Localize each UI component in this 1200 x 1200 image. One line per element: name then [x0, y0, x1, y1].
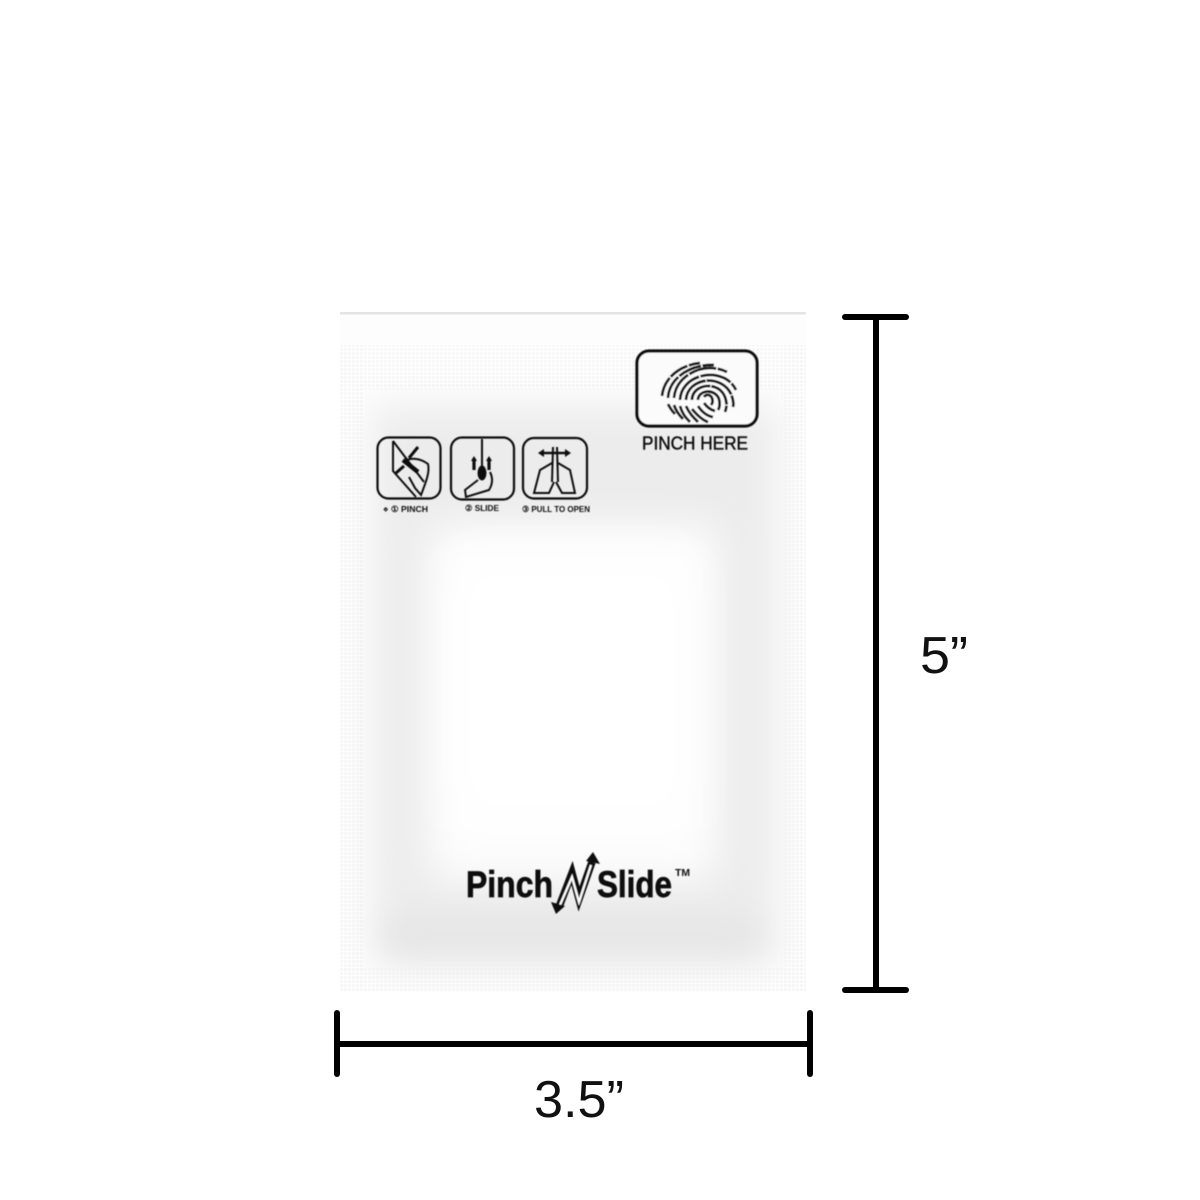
dimension: height bracket	[845, 317, 906, 990]
label: step captions: ③ PULL TO OPEN	[522, 504, 590, 514]
icon: pinch here fingerprint box	[637, 351, 757, 454]
label: height 5 inches: 5”	[920, 627, 968, 685]
icon: step 1 pinch	[378, 438, 440, 498]
infographic canvas	[334, 312, 966, 1118]
label: width 3.5 inches: 3.5”	[534, 1071, 624, 1129]
label: step captions: ⋄ ① PINCH	[383, 504, 428, 514]
label: step captions: ② SLIDE	[465, 503, 499, 513]
icon: N arrow	[551, 852, 600, 914]
logo: Pinch N Slide	[466, 852, 690, 914]
panel: pouch	[340, 312, 806, 992]
dimension: width bracket	[337, 1013, 810, 1074]
logo: Pinch N Slide: Slide	[597, 864, 672, 905]
label: pinch here: PINCH HERE	[642, 434, 748, 454]
icon: step 2 slide	[451, 438, 514, 500]
logo: Pinch N Slide: Pinch	[466, 864, 553, 905]
fingerprint	[662, 363, 736, 422]
icon: step 3 pull to open	[523, 438, 587, 498]
logo: Pinch N Slide: TM	[675, 868, 690, 879]
label: step captions	[383, 503, 590, 514]
